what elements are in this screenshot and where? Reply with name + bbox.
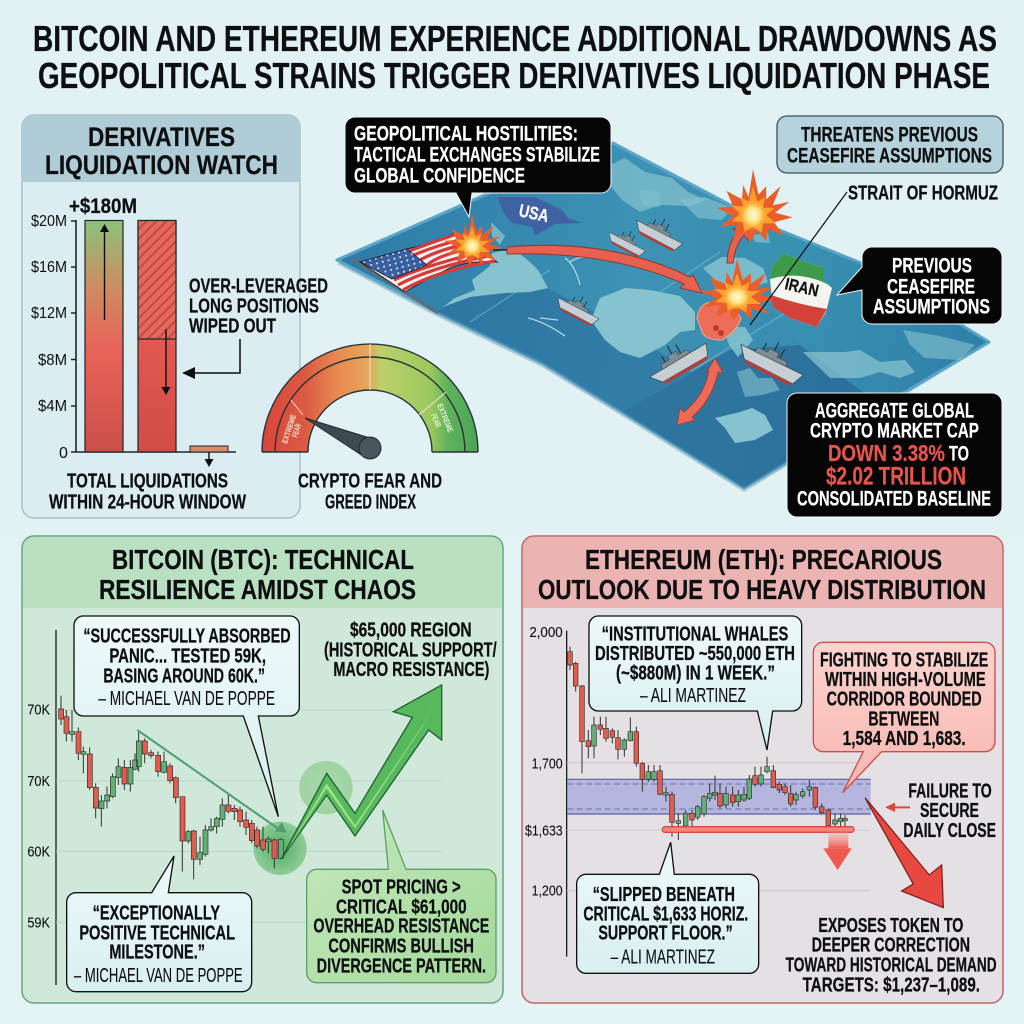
panel header: bitcoin: RESILIENCE AMIDST CHAOS [99, 574, 416, 605]
callout: spot pricing: CONFIRMS BULLISH [328, 935, 474, 958]
icon: iran flag [770, 253, 832, 327]
callout: geopolitical hostilities: GLOBAL CONFIDENCE [354, 164, 525, 188]
callout: slipped beneath [577, 842, 759, 973]
label: failure to secure daily close [903, 780, 996, 842]
gauge: crypto fear and greed index: EXTREME [435, 402, 455, 434]
bar chart: liquidations: $12M [31, 305, 67, 322]
bar chart: liquidations: $4M [38, 398, 67, 415]
btc candlestick chart: 70K [27, 703, 50, 719]
gauge: crypto fear and greed index [262, 344, 478, 459]
big green arrow [282, 685, 442, 858]
label: 65000 region: $65,000 REGION [350, 618, 472, 641]
label: 65000 region [324, 618, 497, 681]
callout: exceptionally positive [67, 856, 252, 992]
eth candlestick chart: 1,200 [532, 883, 563, 899]
map: geopolitical hostilities [337, 143, 989, 492]
gauge: crypto fear and greed index: FEAR [429, 412, 443, 429]
callout: spot pricing: DIVERGENCE PATTERN. [317, 955, 486, 978]
callout: successfully absorbed panic: PANIC... TESTED 59K, [109, 645, 266, 668]
btc candlestick chart: 70K [27, 774, 50, 790]
panel header: bitcoin: BITCOIN (BTC): TECHNICAL [112, 544, 414, 575]
panel: bitcoin [22, 536, 503, 1003]
callout: institutional whales: – ALI MARTINEZ [640, 684, 746, 707]
callout: exceptionally positive: – MICHAEL VAN DE POPPE [74, 964, 243, 987]
callout: spot pricing: SPOT PRICING > [342, 876, 461, 899]
callout: slipped beneath: SUPPORT FLOOR.” [598, 922, 733, 945]
map label: USA [498, 197, 582, 236]
callout: previous ceasefire assumptions: PREVIOUS [892, 254, 972, 278]
callout: successfully absorbed panic: – MICHAEL VAN DE POPPE [98, 687, 275, 710]
callout: exceptionally positive: MILESTONE.” [109, 940, 205, 963]
callout: slipped beneath: CRITICAL $1,633 HORIZ. [583, 902, 748, 925]
btc candlestick chart: 60K [27, 844, 50, 860]
annotation: over-leveraged long positions: LONG POSITIONS [189, 294, 319, 318]
callout: geopolitical hostilities: GEOPOLITICAL HOSTILITIES: [354, 122, 578, 146]
arrow: double headed [677, 358, 723, 425]
icon: american flag [352, 214, 503, 313]
callout: aggregate global crypto market cap: TO [949, 442, 969, 466]
callout: successfully absorbed panic: BASING AROUND 60K.” [103, 665, 265, 688]
highlight circles [253, 761, 353, 875]
callout: institutional whales: “INSTITUTIONAL WHALES [602, 622, 788, 645]
callout: successfully absorbed panic [74, 616, 299, 817]
callout: successfully absorbed panic: “SUCCESSFULLY ABSORBED [83, 625, 291, 648]
bar chart: liquidations: $8M [38, 352, 67, 369]
callout: threatens previous ceasefire assumptions [777, 116, 1003, 173]
caption: crypto fear and greed index [298, 470, 442, 514]
gauge: crypto fear and greed index: FEAR [290, 422, 303, 439]
bar chart: liquidations: 0 [59, 445, 68, 462]
explosion: north [717, 169, 793, 243]
callout: spot pricing [307, 810, 496, 983]
caption: total liquidations: TOTAL LIQUIDATIONS [67, 470, 228, 492]
caption: crypto fear and greed index: GREED INDEX [325, 490, 416, 514]
callout: fighting to stabilize: 1,584 AND 1,683. [843, 727, 966, 750]
callout: slipped beneath: – ALI MARTINEZ [611, 945, 715, 968]
panel header: ethereum [523, 537, 1002, 608]
label: 65000 region: (HISTORICAL SUPPORT/ [324, 638, 497, 661]
annotation: over-leveraged long positions [182, 274, 328, 379]
eth candlestick chart: $1,633 [525, 823, 563, 839]
bar chart: liquidations: $16M [31, 259, 67, 276]
title [33, 18, 997, 96]
annotation: over-leveraged long positions: OVER-LEVERAGED [189, 274, 328, 298]
arrow: up to northern strike [727, 223, 750, 263]
label: strait of hormuz [750, 182, 998, 325]
panel header: derivatives liquidation watch [22, 115, 300, 182]
callout: aggregate global crypto market cap: $2.02 TRILLION [826, 462, 966, 490]
label: failure to secure daily close: SECURE [920, 799, 979, 822]
eth candlestick chart: 2,000 [529, 625, 563, 641]
panel header: derivatives liquidation watch: DERIVATIVES [88, 122, 235, 152]
arrow: short breakdown [823, 832, 852, 870]
callout: exceptionally positive: POSITIVE TECHNICAL [79, 921, 235, 944]
trendline arrow [137, 730, 287, 833]
btc candlestick chart: 59K [27, 916, 50, 932]
panel header: derivatives liquidation watch: LIQUIDATION WATCH [45, 150, 278, 180]
callout: geopolitical hostilities [345, 117, 611, 217]
callout: institutional whales: (~$880M) IN 1 WEEK.” [616, 661, 775, 684]
callout: slipped beneath: “SLIPPED BENEATH [593, 883, 735, 906]
arrow: failure pointer [885, 803, 910, 812]
callout: aggregate global crypto market cap [787, 393, 1002, 517]
panel header: bitcoin [23, 537, 502, 608]
callout: spot pricing: OVERHEAD RESISTANCE [313, 915, 489, 938]
callout: aggregate global crypto market cap: DOWN 3.38% [828, 440, 945, 466]
map land masses [443, 158, 975, 443]
high-volume corridor band [567, 779, 871, 814]
panel: ethereum [522, 536, 1003, 1003]
explosion: central [699, 259, 778, 320]
bar chart: liquidations: $20M [31, 213, 67, 230]
callout: fighting to stabilize: BETWEEN [868, 707, 939, 730]
arrow: big downward red [865, 798, 943, 908]
callout: geopolitical hostilities: TACTICAL EXCHANGES STABILIZE [354, 142, 600, 166]
gauge needle [305, 418, 381, 459]
callout: fighting to stabilize [813, 642, 995, 793]
callout: institutional whales [589, 616, 802, 750]
annotation: over-leveraged long positions: WIPED OUT [189, 314, 276, 338]
bar chart: liquidations [31, 195, 236, 467]
eth candlestick chart: 1,700 [532, 757, 563, 773]
caption: total liquidations [49, 470, 246, 514]
text: exposes token to deeper correction: EXPOSES TOKEN TO [818, 914, 963, 937]
callout: spot pricing: CRITICAL $61,000 [336, 896, 467, 919]
map squiggles [528, 257, 592, 336]
caption: crypto fear and greed index: CRYPTO FEAR AND [298, 470, 442, 492]
explosion near flag [444, 214, 503, 266]
bar chart: liquidations: +$180M [69, 195, 137, 218]
callout: previous ceasefire assumptions: CEASEFIRE [887, 274, 975, 298]
callout: exceptionally positive: “EXCEPTIONALLY [93, 901, 220, 924]
support floor line [662, 827, 854, 832]
arrow: flag to gulf [493, 245, 702, 293]
label: 65000 region: MACRO RESISTANCE) [333, 658, 489, 681]
eth candlestick chart [525, 616, 997, 997]
icon: iran flag: IRAN [783, 274, 821, 301]
callout: institutional whales: DISTRIBUTED ~550,000 ETH [595, 642, 795, 665]
callout: previous ceasefire assumptions [837, 247, 1002, 324]
text: exposes token to deeper correction [786, 914, 997, 997]
map label: USA: USA [517, 200, 551, 226]
caption: total liquidations: WITHIN 24-HOUR WINDOW [49, 490, 246, 514]
panel: derivatives liquidation watch [22, 115, 478, 518]
region: strait red zone [697, 302, 741, 340]
panel header: ethereum: ETHEREUM (ETH): PRECARIOUS [585, 544, 942, 575]
gauge: crypto fear and greed index: EXTREME [280, 413, 298, 445]
btc candlestick chart [27, 616, 497, 992]
ships [553, 208, 811, 389]
